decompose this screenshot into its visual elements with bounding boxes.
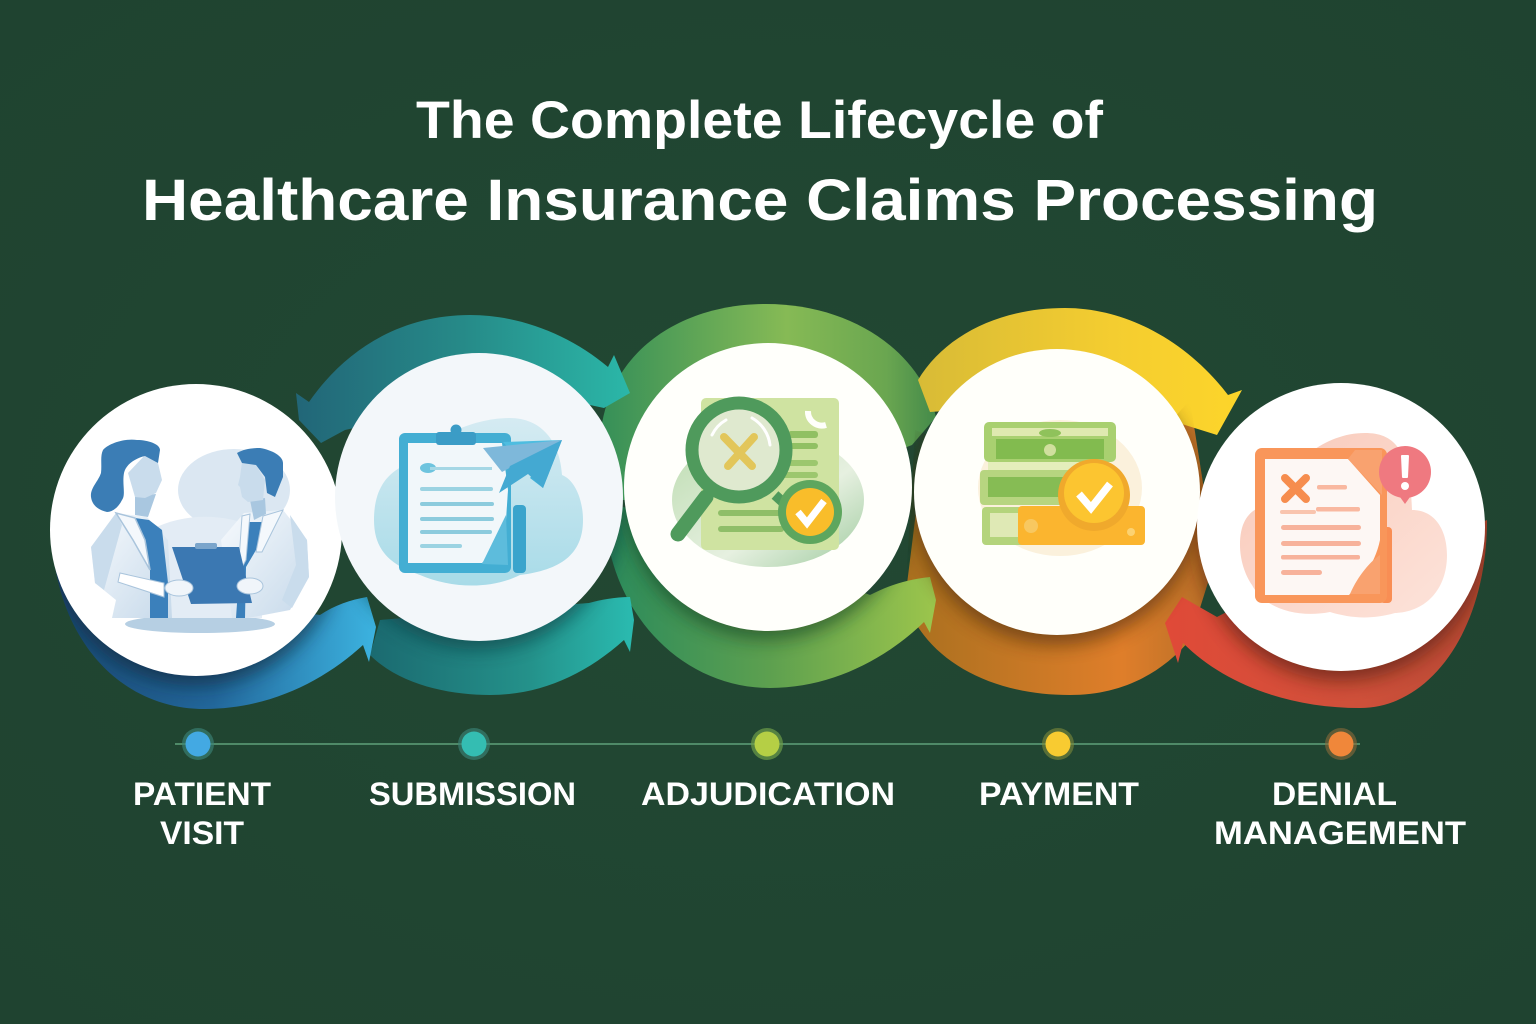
label: patient visit bbox=[133, 776, 271, 851]
label: denial management: DENIAL bbox=[1272, 776, 1397, 812]
arrow: teal bottom arc bbox=[370, 597, 634, 695]
left doctor bbox=[91, 440, 172, 618]
circle 3 bbox=[624, 343, 912, 631]
dot: payment bbox=[1042, 728, 1074, 760]
label: adjudication: ADJUDICATION bbox=[641, 776, 895, 812]
check badge bbox=[778, 480, 842, 544]
arrow: orange bottom arc bbox=[905, 400, 1215, 695]
dot: denial management bbox=[1325, 728, 1357, 760]
icon: magnifier over document with check badge bbox=[672, 398, 864, 567]
paper plane bbox=[483, 440, 562, 493]
magnifier bbox=[678, 403, 797, 534]
panel: payment bbox=[914, 349, 1200, 635]
label: denial management: MANAGEMENT bbox=[1214, 815, 1466, 851]
panel: denial management bbox=[1197, 383, 1485, 671]
label: submission: SUBMISSION bbox=[369, 776, 576, 812]
coin with check bbox=[1058, 459, 1130, 531]
title bbox=[142, 91, 1378, 233]
icon: money stacks with coin bbox=[978, 420, 1145, 556]
timeline bbox=[175, 728, 1360, 760]
icon: clipboard with paper plane bbox=[374, 418, 583, 586]
panel: adjudication bbox=[624, 343, 912, 631]
hands bbox=[165, 580, 193, 596]
right doctor bbox=[221, 448, 309, 618]
label: denial management bbox=[1214, 776, 1466, 851]
circle 5 bbox=[1197, 383, 1485, 671]
step labels bbox=[133, 776, 1466, 851]
circle 4 bbox=[914, 349, 1200, 635]
panel: patient visit bbox=[50, 384, 342, 676]
title line 2: Healthcare Insurance Claims Processing bbox=[142, 168, 1378, 233]
label: payment: PAYMENT bbox=[979, 776, 1139, 812]
dot: patient visit bbox=[182, 728, 214, 760]
label: patient visit: PATIENT bbox=[133, 776, 271, 812]
dot: submission bbox=[458, 728, 490, 760]
clipboard bbox=[172, 547, 252, 604]
circle shadows on arcs bbox=[56, 409, 1487, 696]
alert badge bbox=[1379, 446, 1431, 504]
arrow: teal top arc bbox=[296, 315, 630, 443]
arrow: blue bottom arc bbox=[52, 540, 376, 709]
label: patient visit: VISIT bbox=[160, 815, 244, 851]
arrow: red bottom arc bbox=[1165, 520, 1487, 708]
icon: two doctors with clipboard bbox=[91, 440, 309, 633]
circle 2 bbox=[335, 353, 623, 641]
arrow: green bottom arc bbox=[604, 500, 936, 688]
panel: submission bbox=[335, 353, 623, 641]
title line 1: The Complete Lifecycle of bbox=[416, 91, 1103, 150]
arrow: yellow top arc bbox=[918, 308, 1242, 435]
icon: rejected document with alert bbox=[1240, 433, 1447, 617]
dot: adjudication bbox=[751, 728, 783, 760]
arrow: green top arc bbox=[600, 304, 936, 500]
cycle arrows bbox=[50, 304, 1487, 709]
circle 1 bbox=[50, 384, 342, 676]
